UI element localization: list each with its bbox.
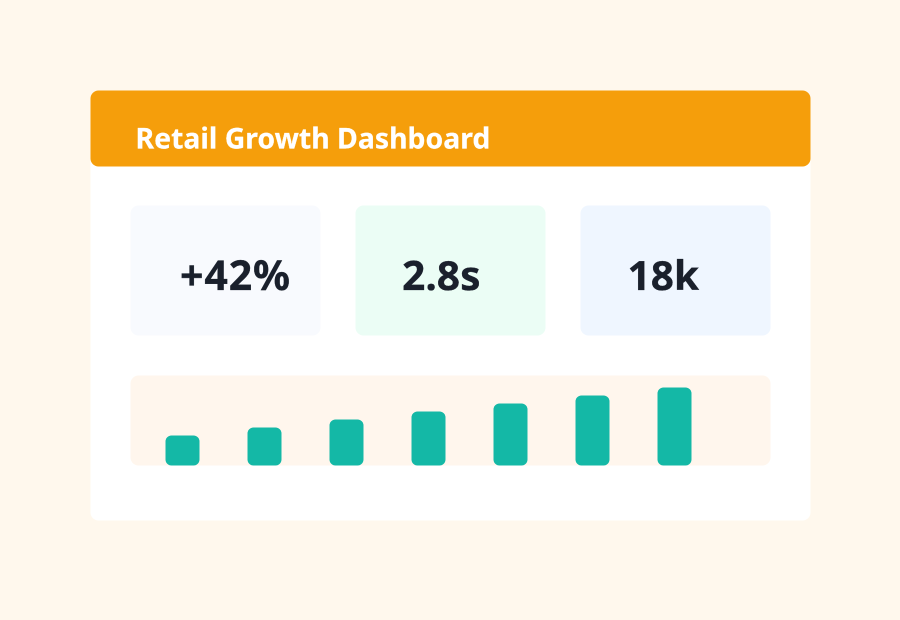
panel: +42% metric [130,206,320,336]
bar chart [130,376,770,466]
dashboard card [90,90,810,520]
title: Retail Growth Dashboard [136,120,490,158]
panel: +42% metric: +42% [180,247,291,303]
panel: 18k metric: 18k [628,247,700,302]
panel: 2.8s metric [356,206,546,336]
header bar [90,90,810,166]
panel: 18k metric [580,206,770,336]
panel: 2.8s metric: 2.8s [402,246,481,302]
